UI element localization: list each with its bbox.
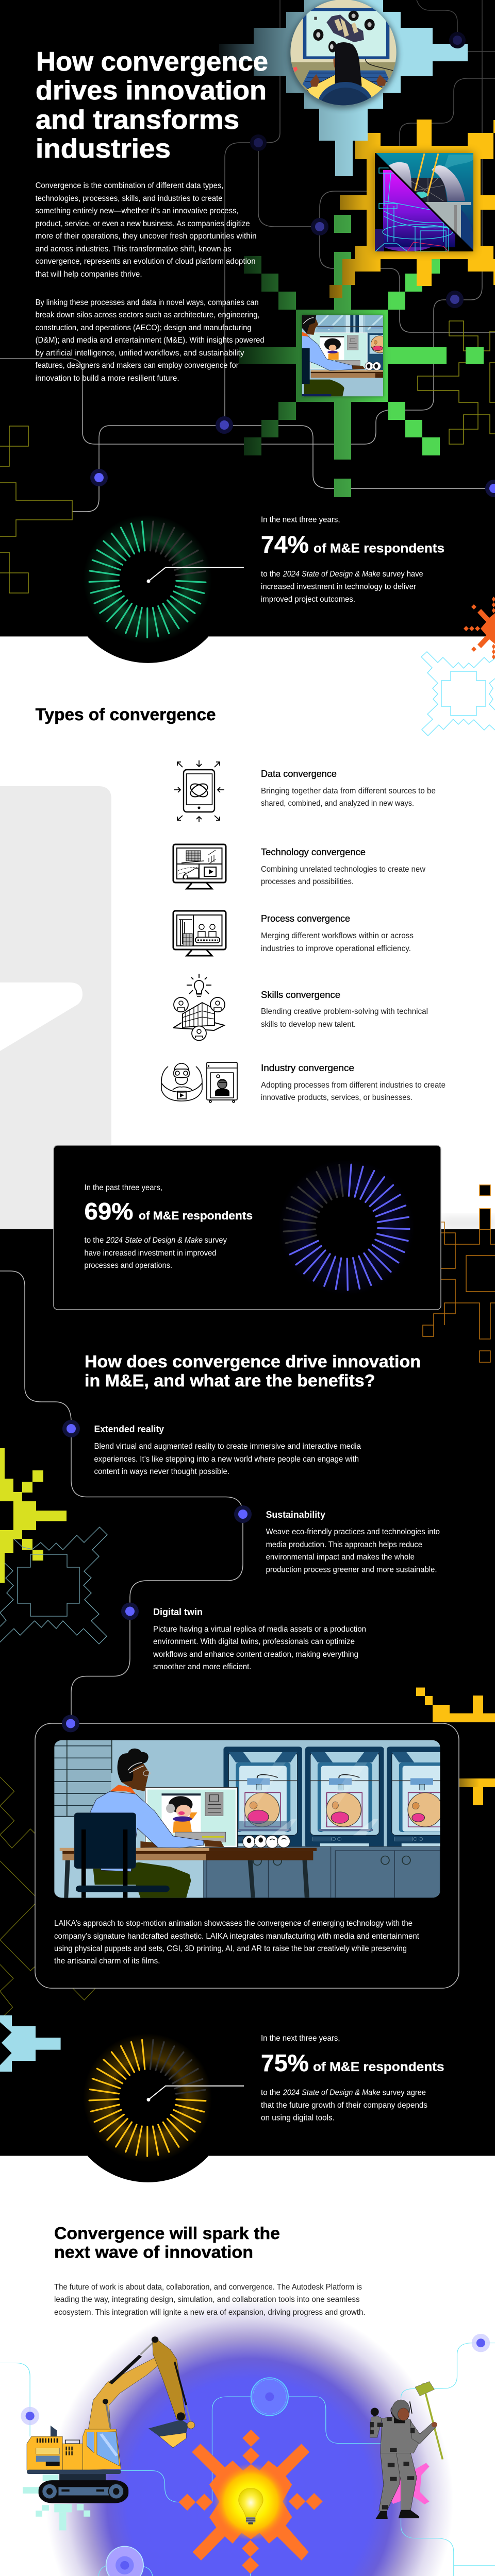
icon: headset user and 3D printer: [161, 1062, 237, 1103]
stat 3 text: survey agree: [383, 2089, 426, 2097]
needle pointer, stat 1: [146, 568, 244, 583]
stat 3 text: on using digital tools.: [261, 2114, 335, 2123]
benefit: sustainability: Sustainability: [266, 1510, 325, 1520]
soft shadow near orange motif: [441, 1217, 495, 1229]
item: data convergence: [174, 760, 436, 822]
lime pixel motif: [0, 1448, 67, 1583]
gold pixel motif: [416, 1688, 495, 1805]
item: technology convergence: [173, 844, 426, 889]
stat card: 69 percent: survey: [204, 1236, 227, 1245]
pixel shape: green cross: [239, 215, 484, 497]
benefit: extended reality: content in ways never thought possible.: [94, 1467, 229, 1476]
stat 3 text: to the: [261, 2089, 283, 2097]
intro paragraph 1: convergence, represents an evolution of cloud platform adoption: [36, 257, 256, 266]
item: technology convergence: Combining unrelated technologies to create new: [261, 865, 426, 874]
closing paragraph: [54, 2283, 365, 2317]
item: industry convergence: Industry convergence: [261, 1063, 354, 1073]
connector nodes: [21, 2334, 490, 2576]
item: data convergence: shared, combined, and analyzed in new ways.: [261, 799, 414, 808]
intro paragraph 2: innovation to build a more resilient future.: [36, 374, 179, 383]
closing illustration: [0, 2334, 495, 2576]
ring chart: 75 percent: [83, 2033, 212, 2162]
intro paragraph 2: by artificial intelligence, unified workflows, and sustainability: [36, 349, 244, 358]
monitor with character: [145, 1787, 290, 1848]
closing paragraph: ecosystem. This integration will ignite a new era of expansion, driving progress and growth.: [54, 2308, 365, 2317]
connector line with benefits: [0, 1271, 243, 1723]
intro paragraph 2: features, designers and makers can employ convergence for: [36, 361, 239, 370]
halo behind closing illustration: [31, 2287, 469, 2576]
benefit: extended reality: Extended reality: [94, 1424, 164, 1434]
olive zigzag outline motif: [0, 1777, 95, 2020]
intro paragraph 2: break down silos across sectors such as architecture, engineering,: [36, 311, 260, 319]
mint pixel motif: [23, 2475, 90, 2530]
intro paragraph 1: technologies, processes, skills, and industries to create: [36, 194, 223, 203]
pixel shape: yellow frame: [329, 120, 495, 298]
chair: [74, 1813, 170, 1898]
item: data convergence: Bringing together data from different sources to be: [261, 787, 436, 795]
intro paragraph 1: [36, 181, 257, 279]
benefit: sustainability: [234, 1505, 440, 1574]
icon: light bulb over building with people: [173, 974, 225, 1041]
stat 1 text: In the next three years,: [261, 515, 340, 524]
title: and transforms: [36, 105, 239, 135]
circuit lines behind hero: [0, 0, 495, 512]
section: dark benefits background: [0, 1229, 495, 2156]
benefit: digital twin: Digital twin: [153, 1607, 203, 1617]
item: industry convergence: [161, 1062, 446, 1103]
black half circle under stat 3: [88, 2156, 208, 2182]
intro paragraph 2: (D&M); and media and entertainment (M&E). With insights powered: [36, 336, 265, 345]
teal outline pixel motif: [0, 1527, 107, 1644]
heading: convergence will spark: next wave of innovation: [54, 2243, 253, 2262]
stat 3 text: of M&E respondents: [313, 2060, 444, 2074]
benefit: extended reality: [62, 1420, 361, 1476]
stat card: 69 percent: In the past three years,: [85, 1183, 162, 1192]
title: industries: [36, 134, 171, 164]
heading: how does convergence drive innovation: [85, 1352, 421, 1390]
intro paragraph 2: By linking these processes and data in novel ways, companies can: [36, 298, 259, 307]
desk: [60, 1848, 317, 1898]
benefit: digital twin: environment. With digital twins, professionals can optimize: [153, 1637, 355, 1646]
card connector dot: [62, 1715, 79, 1732]
intro paragraph 1: product, service, or even a new business. As companies digitize: [36, 219, 250, 228]
stat 1 text: [261, 515, 444, 604]
circuit dots, hero: [90, 32, 495, 497]
intro paragraph 1: something entirely new—whether it’s an innovative process,: [36, 207, 239, 215]
benefit: sustainability: production process greener and more sustainable.: [266, 1565, 437, 1574]
stat 1 text: increased investment in technology to deliver: [261, 583, 416, 591]
stat card: 69 percent: [54, 1145, 441, 1310]
heading: types of convergence: Types of convergence: [36, 705, 216, 724]
item: industry convergence: Adopting processes from different industries to create: [261, 1081, 446, 1090]
stat card: 69 percent: of M&E respondents: [139, 1209, 253, 1222]
benefit: digital twin: smoother and more efficient.: [153, 1663, 252, 1671]
white section background, bottom: [0, 2156, 495, 2576]
benefit: sustainability: media production. This approach helps reduce: [266, 1540, 422, 1549]
intro paragraph 1: and across industries. This transformative shift, known as: [36, 245, 232, 253]
benefit: extended reality: Blend virtual and augmented reality to create immersive and interactive media: [94, 1442, 361, 1451]
stat 1 text: of M&E respondents: [314, 541, 444, 555]
story card: LAIKA: the artisanal charm of its films.: [54, 1957, 160, 1965]
stat 3 text: 2024 State of Design & Make: [283, 2089, 381, 2097]
stat 3 text: 75%: [261, 2049, 309, 2076]
closing paragraph: leading the way, integrating design, simulation, and collaboration tools into one seamless: [54, 2295, 360, 2304]
illustration: animator at monitor: [302, 315, 389, 396]
icon: monitor with four panes: [173, 844, 226, 889]
closing paragraph: The future of work is about data, collaboration, and convergence. The Autodesk Platform is: [54, 2283, 362, 2292]
stat card: 69 percent: have increased investment in improved: [85, 1249, 217, 1258]
heading: convergence will spark: [54, 2224, 280, 2262]
intro paragraph 1: that will help companies thrive.: [36, 270, 142, 279]
pink pixel motif: [391, 2463, 430, 2504]
stat card: 69 percent: 69%: [85, 1198, 133, 1225]
printers: [223, 1747, 302, 1848]
stat 1 text: 74%: [261, 531, 309, 557]
item: technology convergence: processes and possibilities.: [261, 877, 354, 886]
cyan outline pixel motif: [421, 652, 495, 736]
benefit: sustainability: Weave eco-friendly practices and technologies into: [266, 1528, 440, 1536]
heading: how does convergence drive innovation: How does convergence drive innovation: [85, 1352, 421, 1371]
item: data convergence: Data convergence: [261, 769, 337, 779]
story card: LAIKA: company’s signature handcrafted aesthetic. LAIKA integrates manufacturing with media and entertainment: [54, 1932, 420, 1941]
needle pointer, stat 3: [146, 2086, 244, 2102]
motion capture performer with hammer: [370, 2381, 442, 2519]
illustration: observatory real and wireframe split: [375, 153, 473, 251]
item: process convergence: Process convergence: [261, 913, 350, 924]
stat 3 text: that the future growth of their company depends: [261, 2101, 427, 2110]
pixel shape: light blue burst: [219, 0, 468, 176]
intro paragraph 2: [36, 298, 265, 383]
white section background: [0, 637, 495, 1229]
item: technology convergence: Technology convergence: [261, 847, 366, 857]
ring chart: 69 percent: [278, 1159, 415, 1295]
stat 3 text: In the next three years,: [261, 2034, 340, 2043]
illustration: person viewing exploded car on monitor: [286, 0, 402, 112]
item: skills convergence: skills to develop new talent.: [261, 1020, 356, 1029]
item: skills convergence: Skills convergence: [261, 990, 340, 1000]
item: skills convergence: [173, 974, 428, 1041]
orange outline pixel motif: [423, 1185, 495, 1362]
olive outline pixel pattern, right: [418, 321, 495, 444]
heading: how does convergence drive innovation: in M&E, and what are the benefits?: [85, 1371, 375, 1390]
stat 1 text: 2024 State of Design & Make: [283, 570, 381, 579]
story card: LAIKA: using physical puppets and sets, CGI, 3D printing, AI, and AR to raise the bar creatively while preserving: [54, 1944, 407, 1953]
stat 3 text: [261, 2034, 444, 2123]
cyan connector lines: [0, 2343, 495, 2576]
heading: convergence will spark: Convergence will spark the: [54, 2224, 280, 2243]
icon: phone with inward arrows: [174, 760, 224, 822]
benefit: digital twin: Picture having a virtual replica of media assets or a production: [153, 1625, 366, 1634]
section: dark hero background: [0, 0, 495, 637]
starburst with light bulb: [179, 2430, 323, 2574]
item: skills convergence: Blending creative problem-solving with technical: [261, 1007, 428, 1016]
item: process convergence: industries to improve operational efficiency.: [261, 944, 411, 953]
story card: LAIKA: LAIKA’s approach to stop-motion animation showcases the convergence of emerging technology with the: [54, 1919, 412, 1928]
orange pixel motif: [464, 597, 495, 659]
stat 1 text: to the: [261, 570, 283, 579]
title: How convergence: [36, 47, 268, 77]
light blue pixel motif: [0, 2015, 61, 2072]
black half circle under stat 1: [88, 637, 208, 663]
excavator: [27, 2336, 195, 2503]
title: [36, 47, 268, 164]
stat card: 69 percent: processes and operations.: [85, 1261, 172, 1270]
cabinets: [204, 1846, 440, 1898]
illustration: animator and 3D printers: [54, 1740, 465, 1898]
stat card: 69 percent: 2024 State of Design & Make: [106, 1236, 203, 1245]
intro paragraph 2: construction, and operations (AECO); design and manufacturing: [36, 324, 252, 332]
title: drives innovation: [36, 76, 267, 106]
benefit: digital twin: [121, 1602, 366, 1671]
story card: LAIKA: [35, 1723, 465, 1988]
item: industry convergence: innovative products, services, or businesses.: [261, 1093, 412, 1102]
stat 1 text: improved project outcomes.: [261, 595, 355, 604]
intro paragraph 1: Convergence is the combination of different data types,: [36, 181, 224, 190]
benefit: extended reality: experiences. It’s like stepping into a new world where people can engage with: [94, 1455, 359, 1464]
grey backdrop shape: [0, 786, 111, 1229]
benefit: digital twin: workflows and enhance content creation, making everything: [153, 1650, 358, 1659]
benefit: sustainability: environmental impact and makes the whole: [266, 1553, 415, 1562]
stat 1 text: survey have: [383, 570, 423, 579]
item: process convergence: Merging different workflows within or across: [261, 931, 414, 940]
intro paragraph 1: more of their operations, they uncover fresh opportunities within: [36, 232, 257, 241]
olive outline pixel pattern, left: [0, 426, 72, 593]
icon: monitor with crane and assembly line: [173, 911, 226, 956]
ring chart: 74 percent: [83, 515, 212, 644]
animator figure: [91, 1749, 224, 1898]
stat card: 69 percent: to the: [85, 1236, 106, 1245]
item: process convergence: [173, 911, 414, 956]
